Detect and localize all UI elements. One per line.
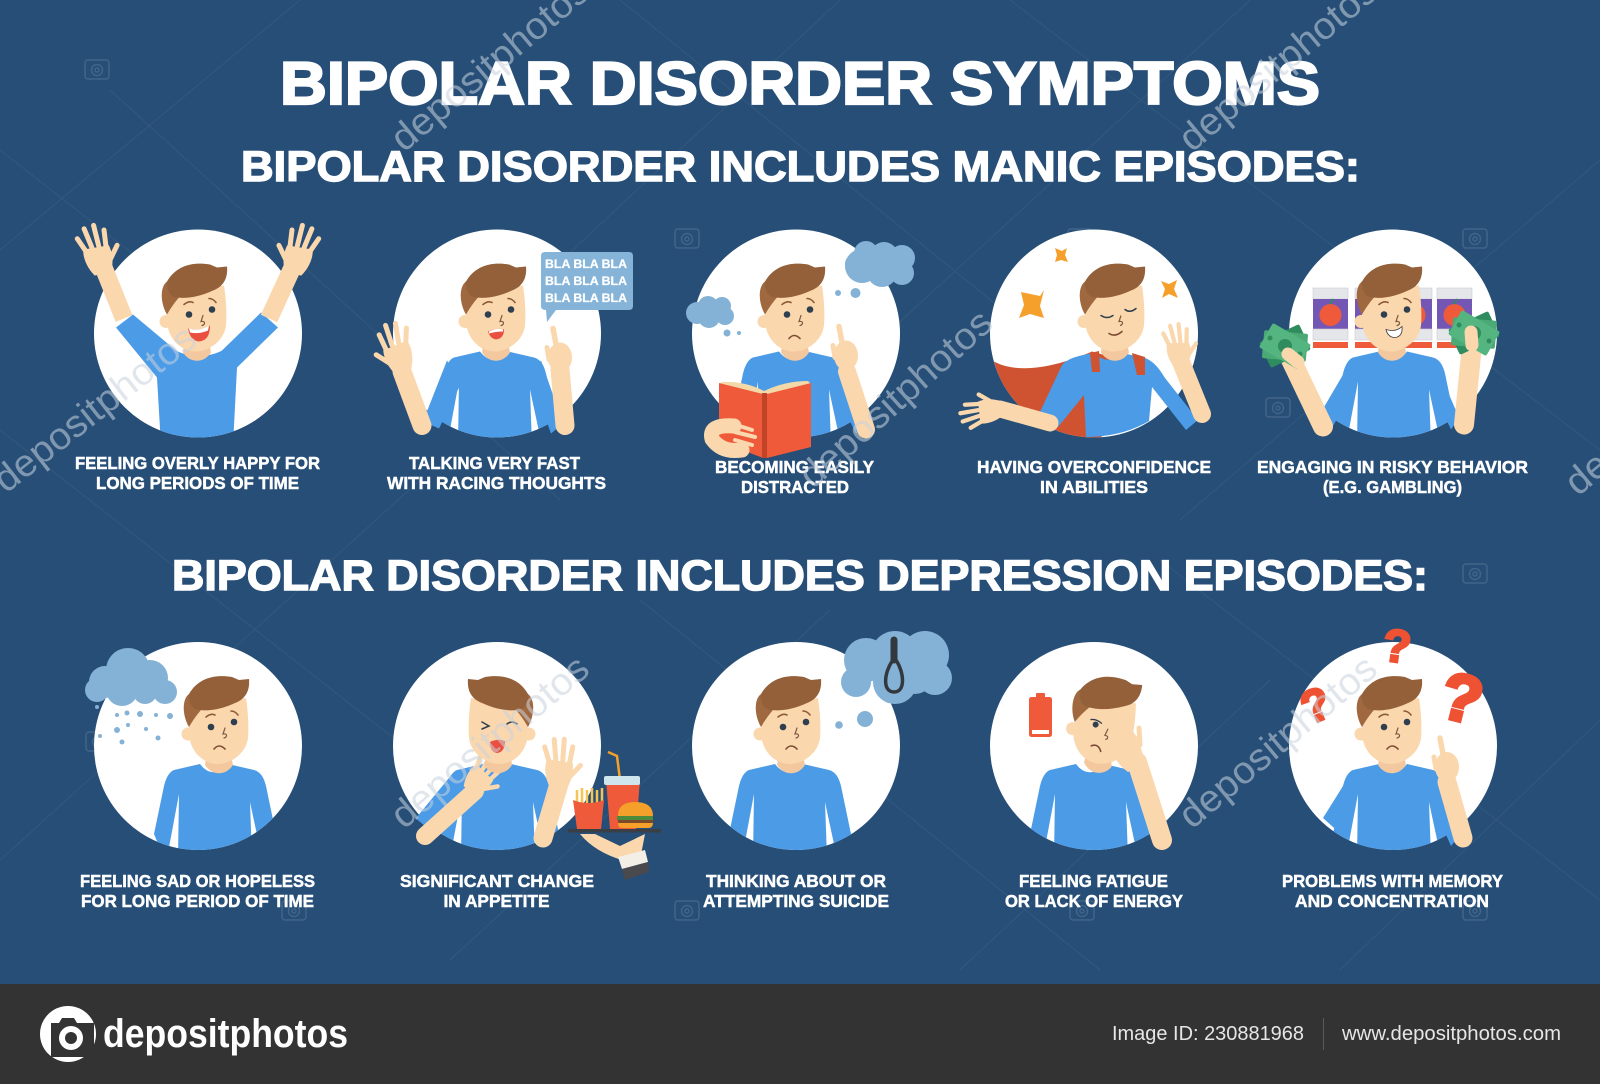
panel: problems with memory xyxy=(1282,618,1503,911)
icon: red cape xyxy=(994,352,1110,438)
speech bubble: BLA BLA BLA xyxy=(545,274,627,288)
icon: rain cloud xyxy=(85,648,177,744)
caption: thinking about suicide: ATTEMPTING SUICIDE xyxy=(703,891,889,911)
icon: low battery xyxy=(1029,693,1052,737)
caption: feeling sad or hopeless: FOR LONG PERIOD OF TIME xyxy=(81,891,314,911)
caption: becoming easily distracted xyxy=(715,457,874,497)
caption: engaging in risky behavior xyxy=(1257,457,1528,497)
image id: Image ID: 230881968 xyxy=(1112,1023,1304,1045)
caption: becoming easily distracted: DISTRACTED xyxy=(741,477,849,497)
logo wordmark: depositphotos xyxy=(103,1012,348,1056)
caption: feeling overly happy xyxy=(75,453,320,493)
arm raised to forehead xyxy=(1108,726,1162,840)
caption: problems with memory: AND CONCENTRATION xyxy=(1295,891,1489,911)
caption: talking very fast xyxy=(387,453,606,493)
heading: manic episodes: BIPOLAR DISORDER INCLUDES MANIC EPISODES: xyxy=(241,143,1360,191)
icon: cash in left hand xyxy=(1259,323,1311,369)
panel: becoming easily distracted xyxy=(686,230,915,497)
icon: open red book xyxy=(711,381,811,458)
caption: talking very fast: TALKING VERY FAST xyxy=(409,453,580,473)
caption: having overconfidence xyxy=(977,457,1211,497)
caption: significant change in appetite xyxy=(400,871,594,911)
heading: depression episodes: BIPOLAR DISORDER INCLUDES DEPRESSION EPISODES: xyxy=(172,552,1428,600)
title: BIPOLAR DISORDER SYMPTOMS xyxy=(280,50,1320,117)
caption: significant change in appetite: SIGNIFICANT CHANGE xyxy=(400,871,594,891)
icon: red question marks xyxy=(1293,618,1490,739)
icon: small thought cloud xyxy=(686,296,741,336)
watermark text: depositphotos xyxy=(791,302,1001,497)
caption: feeling sad or hopeless: FEELING SAD OR HOPELESS xyxy=(80,871,315,891)
caption: having overconfidence: IN ABILITIES xyxy=(1040,477,1148,497)
speech bubble: BLA BLA BLA xyxy=(545,291,627,305)
watermark text: depositphotos xyxy=(1171,647,1385,837)
caption: talking very fast: WITH RACING THOUGHTS xyxy=(387,473,606,493)
caption: feeling fatigue xyxy=(1005,871,1183,911)
caption: feeling fatigue: OR LACK OF ENERGY xyxy=(1005,891,1183,911)
website: www.depositphotos.com xyxy=(1341,1023,1561,1045)
icon: red question marks: ? xyxy=(1379,618,1414,674)
panel: feeling sad or hopeless xyxy=(80,642,315,911)
panel: having overconfidence xyxy=(958,230,1211,497)
caption: feeling overly happy: FEELING OVERLY HAPPY FOR xyxy=(75,453,320,473)
icon: thought cloud with noose xyxy=(835,631,952,729)
caption: engaging in risky behavior: ENGAGING IN RISKY BEHAVIOR xyxy=(1257,457,1528,477)
caption: having overconfidence: HAVING OVERCONFIDENCE xyxy=(977,457,1211,477)
icon: red question marks: ? xyxy=(1433,657,1490,739)
speech bubble xyxy=(541,252,633,322)
panel: talking very fast xyxy=(368,230,633,493)
caption: problems with memory: PROBLEMS WITH MEMORY xyxy=(1282,871,1503,891)
caption: becoming easily distracted: BECOMING EASILY xyxy=(715,457,874,477)
panel: feeling fatigue xyxy=(990,642,1198,911)
caption: problems with memory xyxy=(1282,871,1503,911)
icon: slot machine reels xyxy=(1313,288,1472,348)
caption: significant change in appetite: IN APPETITE xyxy=(444,891,550,911)
caption: feeling sad or hopeless xyxy=(80,871,315,911)
icon: large thought cloud xyxy=(835,241,915,298)
panel: thinking about suicide xyxy=(692,631,952,911)
watermark cameras xyxy=(85,60,1487,920)
watermark text: depositphotos xyxy=(383,647,597,837)
watermark text xyxy=(0,0,1600,837)
caption: feeling fatigue: FEELING FATIGUE xyxy=(1019,871,1168,891)
caption: engaging in risky behavior: (E.G. GAMBLING) xyxy=(1323,477,1462,497)
caption: feeling overly happy: LONG PERIODS OF TIME xyxy=(96,473,299,493)
panel: engaging in risky behavior xyxy=(1257,230,1528,497)
panel: feeling overly happy xyxy=(75,221,321,493)
speech bubble: BLA BLA BLA xyxy=(545,257,627,271)
icon: tray of fast food xyxy=(568,752,661,880)
footer bar xyxy=(0,984,1600,1084)
panel: significant change in appetite xyxy=(393,642,661,911)
caption: thinking about suicide xyxy=(703,871,889,911)
icon: orange stars xyxy=(1019,248,1178,318)
icon: red question marks: ? xyxy=(1293,676,1338,734)
icon: cash in right hand xyxy=(1448,310,1500,356)
caption: thinking about suicide: THINKING ABOUT OR xyxy=(706,871,886,891)
icon: depositphotos camera logo xyxy=(40,1006,96,1062)
